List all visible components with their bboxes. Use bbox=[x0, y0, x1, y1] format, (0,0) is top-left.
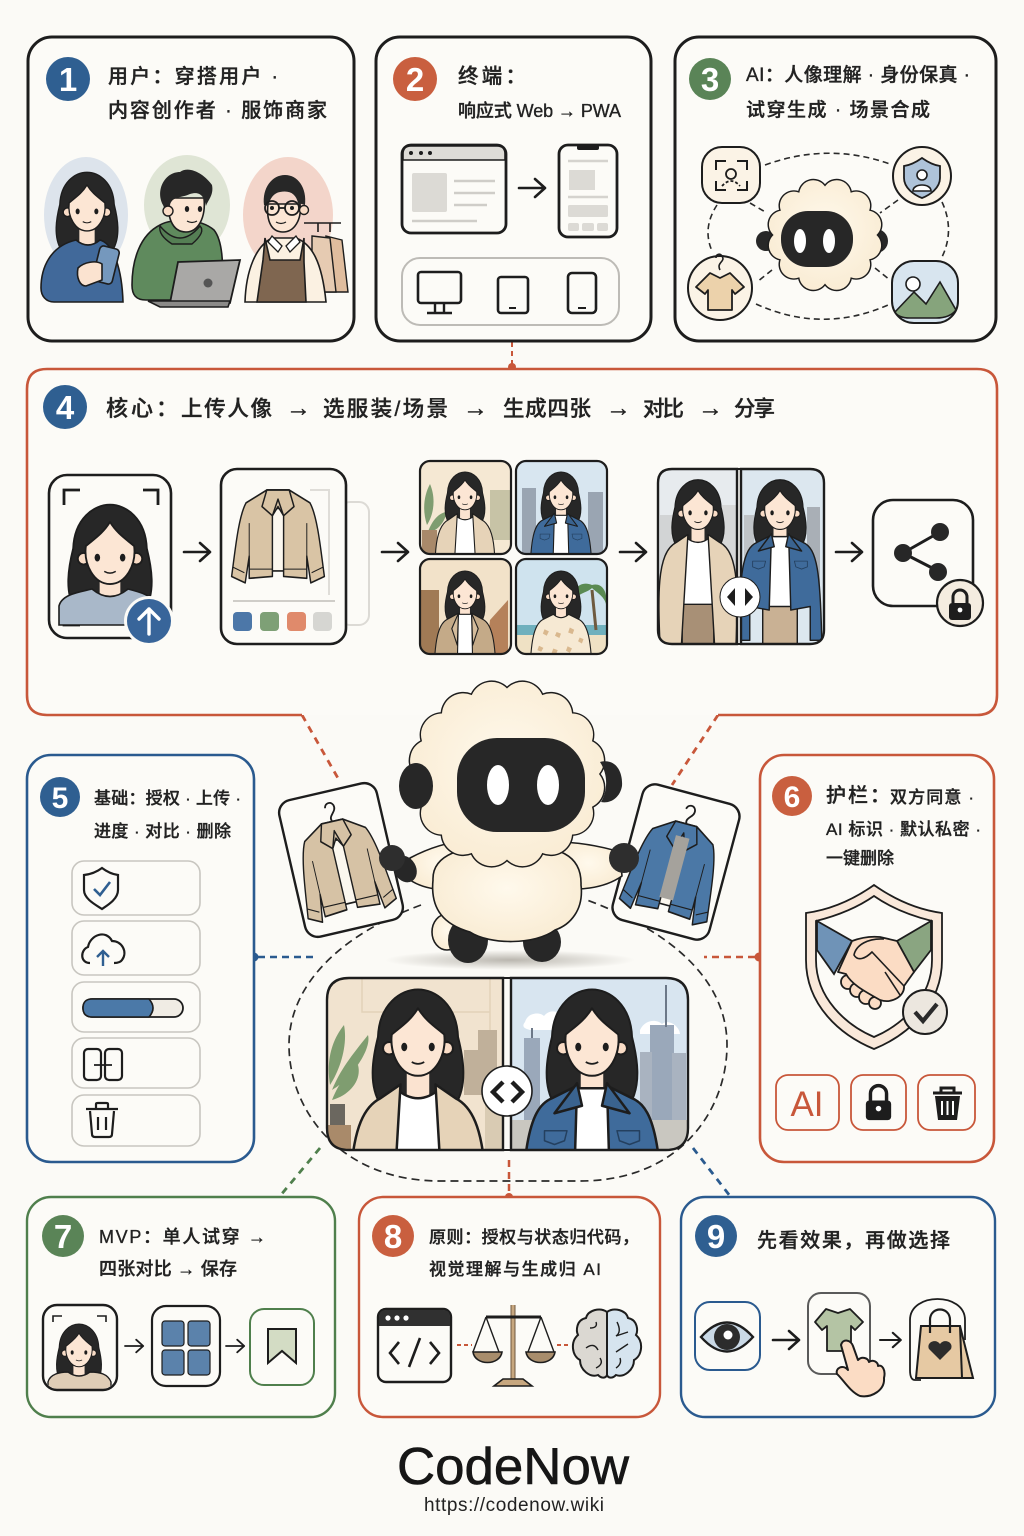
connector: panel 4 to left jacket bbox=[302, 715, 339, 780]
step: side-by-side compare bbox=[658, 469, 824, 657]
dash link bbox=[557, 1344, 571, 1346]
hands bbox=[379, 843, 639, 887]
ground shadow bbox=[385, 950, 635, 970]
device row: desktop, tablet, phone bbox=[402, 258, 619, 325]
look 2 city bbox=[514, 460, 608, 556]
icon: identity shield bbox=[893, 147, 951, 205]
badge 1: 1 bbox=[59, 61, 77, 98]
head wool bbox=[409, 681, 605, 867]
centre compare view bbox=[326, 976, 690, 1152]
panel 5: foundation bbox=[27, 755, 254, 1162]
arrow bbox=[836, 543, 862, 561]
face bbox=[457, 738, 585, 832]
heading: guardrails: 一键删除 bbox=[826, 849, 894, 868]
heading: core flow: 上传人像 bbox=[181, 397, 272, 421]
frame bbox=[327, 978, 688, 1150]
badge 2: 2 bbox=[406, 61, 424, 98]
arrow bbox=[773, 1331, 799, 1349]
panel 7: MVP bbox=[27, 1197, 335, 1417]
icon: tap shirt bbox=[808, 1293, 885, 1396]
row: delete bbox=[72, 1095, 200, 1146]
left half: warm interior bbox=[328, 979, 502, 1149]
heading: terminals: 终端： bbox=[458, 65, 526, 88]
badge 6 bbox=[772, 776, 812, 816]
look 4 beach bbox=[516, 559, 607, 665]
badge 6: 6 bbox=[784, 781, 800, 814]
badge 1 bbox=[46, 57, 90, 101]
heading: users bbox=[108, 65, 327, 122]
heading: core flow: → bbox=[698, 394, 723, 422]
connector: centre to panel 9 bbox=[693, 1148, 730, 1196]
mascot: sheep bbox=[379, 681, 639, 970]
icon: upload badge bbox=[124, 596, 174, 646]
panel 9: see before choosing bbox=[681, 1197, 995, 1417]
right jacket card bbox=[610, 781, 742, 943]
heading: core flow: 核心： bbox=[106, 396, 178, 421]
figure: outfit user with phone bbox=[41, 157, 128, 302]
heading: MVP bbox=[99, 1227, 266, 1279]
row: progress bbox=[72, 982, 200, 1032]
badge 9: 9 bbox=[707, 1218, 725, 1255]
icon: AI label bbox=[776, 1075, 839, 1130]
badge 3 bbox=[689, 58, 731, 100]
icon: sheep mascot bbox=[756, 180, 888, 290]
badge 9 bbox=[695, 1215, 737, 1257]
row: upload bbox=[72, 921, 200, 975]
heading: users: 内容创作者 · 服饰商家 bbox=[108, 99, 327, 122]
icon: eye bbox=[695, 1302, 760, 1370]
step: choose garment bbox=[221, 469, 369, 644]
heading: core flow bbox=[106, 394, 775, 422]
badge 5 bbox=[40, 777, 80, 817]
dashed orbit bbox=[708, 153, 948, 319]
icon: face scan bbox=[702, 147, 760, 203]
icon: compare handle bbox=[482, 1066, 532, 1116]
badge 2 bbox=[393, 57, 437, 101]
heading: foundation: 基础：授权 · 上传 · bbox=[94, 789, 241, 808]
dash link bbox=[457, 1344, 472, 1346]
step: private share bbox=[873, 500, 983, 626]
heading: guardrails: 护栏： bbox=[826, 784, 890, 807]
arrow bbox=[125, 1340, 143, 1352]
badge 5: 5 bbox=[52, 782, 68, 815]
heading: core flow: 对比 bbox=[643, 397, 684, 421]
connector: panel 6 to centre bbox=[704, 952, 764, 962]
panel 6: guardrails bbox=[760, 755, 994, 1162]
heading: see results: 先看效果，再做选择 bbox=[757, 1229, 950, 1252]
step: upload portrait bbox=[49, 475, 174, 646]
panel 1: users bbox=[28, 37, 354, 341]
heading: guardrails: 双方同意 · bbox=[890, 787, 974, 807]
step: four generated looks bbox=[420, 461, 607, 665]
icon: private lock bbox=[851, 1075, 906, 1130]
badge 7: 7 bbox=[54, 1218, 72, 1255]
icon: shopping bag bbox=[910, 1299, 973, 1380]
icon: browser window bbox=[402, 145, 506, 233]
icon: consent shield handshake bbox=[806, 885, 947, 1049]
heading: foundation: 进度 · 对比 · 删除 bbox=[94, 822, 231, 841]
figure: content creator with laptop bbox=[132, 155, 240, 307]
card: save bookmark bbox=[250, 1309, 314, 1385]
connector: panel 4 to right jacket bbox=[672, 715, 718, 785]
badge 4 bbox=[43, 385, 87, 429]
connector: centre to panel 7 bbox=[280, 1148, 320, 1196]
icon: phone PWA bbox=[559, 145, 617, 237]
heading: principles: 原则：授权与状态归代码， bbox=[429, 1228, 639, 1247]
panel 4: core flow bbox=[27, 369, 997, 715]
icon: scene landscape bbox=[892, 261, 958, 323]
heading: MVP: 四张对比 → 保存 bbox=[99, 1259, 237, 1279]
look 1 indoor bbox=[418, 460, 512, 556]
arrow bbox=[382, 543, 408, 561]
icon: brain bbox=[573, 1310, 641, 1378]
panel 2: terminals bbox=[376, 37, 651, 341]
connector: panel 5 to centre bbox=[250, 952, 314, 962]
card: portrait bbox=[43, 1305, 117, 1392]
panel 3: AI bbox=[675, 37, 996, 341]
body bbox=[433, 845, 581, 942]
heading: AI bbox=[746, 64, 970, 121]
connector: centre to panel 8 bbox=[505, 1160, 513, 1201]
icon: shirt on hanger bbox=[688, 254, 752, 320]
icon: delete trash bbox=[918, 1075, 975, 1130]
badge 8 bbox=[372, 1215, 414, 1257]
right half: city bbox=[512, 979, 687, 1149]
arrow: web to PWA bbox=[519, 179, 545, 197]
arrow bbox=[620, 543, 646, 561]
look 3 street bbox=[420, 559, 511, 665]
heading: terminals bbox=[458, 65, 621, 121]
heading: users: 用户：穿搭用户 · bbox=[108, 65, 278, 88]
badge 3: 3 bbox=[701, 61, 719, 98]
arrow bbox=[880, 1333, 901, 1347]
icon: compare handle bbox=[720, 577, 760, 617]
heading: core flow: → bbox=[606, 394, 631, 422]
arrow bbox=[226, 1340, 244, 1352]
connector: panel 2 to panel 4 bbox=[508, 342, 516, 371]
url: https://codenow.wiki bbox=[424, 1495, 604, 1516]
heading: core flow: 分享 bbox=[734, 397, 775, 421]
card: four-grid bbox=[152, 1306, 220, 1386]
icon: balance scale bbox=[473, 1305, 555, 1386]
heading: AI: AI：人像理解 · 身份保真 · bbox=[746, 64, 970, 86]
badge 8: 8 bbox=[384, 1218, 402, 1255]
heading: guardrails: AI 标识 · 默认私密 · bbox=[826, 819, 981, 839]
feet and tail bbox=[432, 914, 561, 963]
ears bbox=[399, 761, 622, 809]
dashed ring around compare view bbox=[289, 900, 727, 1181]
row: compare bbox=[72, 1038, 200, 1088]
arms bbox=[410, 840, 622, 890]
row: authorization bbox=[72, 861, 200, 915]
heading: core flow: → bbox=[463, 394, 488, 422]
badge 4: 4 bbox=[56, 389, 75, 426]
heading: foundation bbox=[94, 789, 241, 841]
panel 8: principles bbox=[359, 1197, 660, 1417]
heading: core flow: 选服装/场景 bbox=[323, 397, 448, 421]
heading: MVP: MVP：单人试穿 → bbox=[99, 1227, 266, 1247]
heading: core flow: → bbox=[286, 394, 311, 422]
logo: CodeNow: CodeNow bbox=[397, 1438, 629, 1496]
badge 7 bbox=[42, 1215, 84, 1257]
heading: core flow: 生成四张 bbox=[503, 397, 591, 421]
left jacket card bbox=[277, 781, 405, 939]
heading: principles bbox=[429, 1228, 639, 1279]
heading: AI: 试穿生成 · 场景合成 bbox=[746, 99, 930, 121]
figure: apparel merchant with rack bbox=[243, 157, 348, 302]
heading: principles: 视觉理解与生成归 AI bbox=[429, 1260, 601, 1279]
heading: terminals: 响应式 Web → PWA bbox=[458, 100, 621, 121]
icon: AI label: AI bbox=[790, 1085, 824, 1124]
icon: code window bbox=[378, 1309, 451, 1382]
arrow bbox=[184, 543, 210, 561]
heading: guardrails bbox=[826, 784, 981, 868]
